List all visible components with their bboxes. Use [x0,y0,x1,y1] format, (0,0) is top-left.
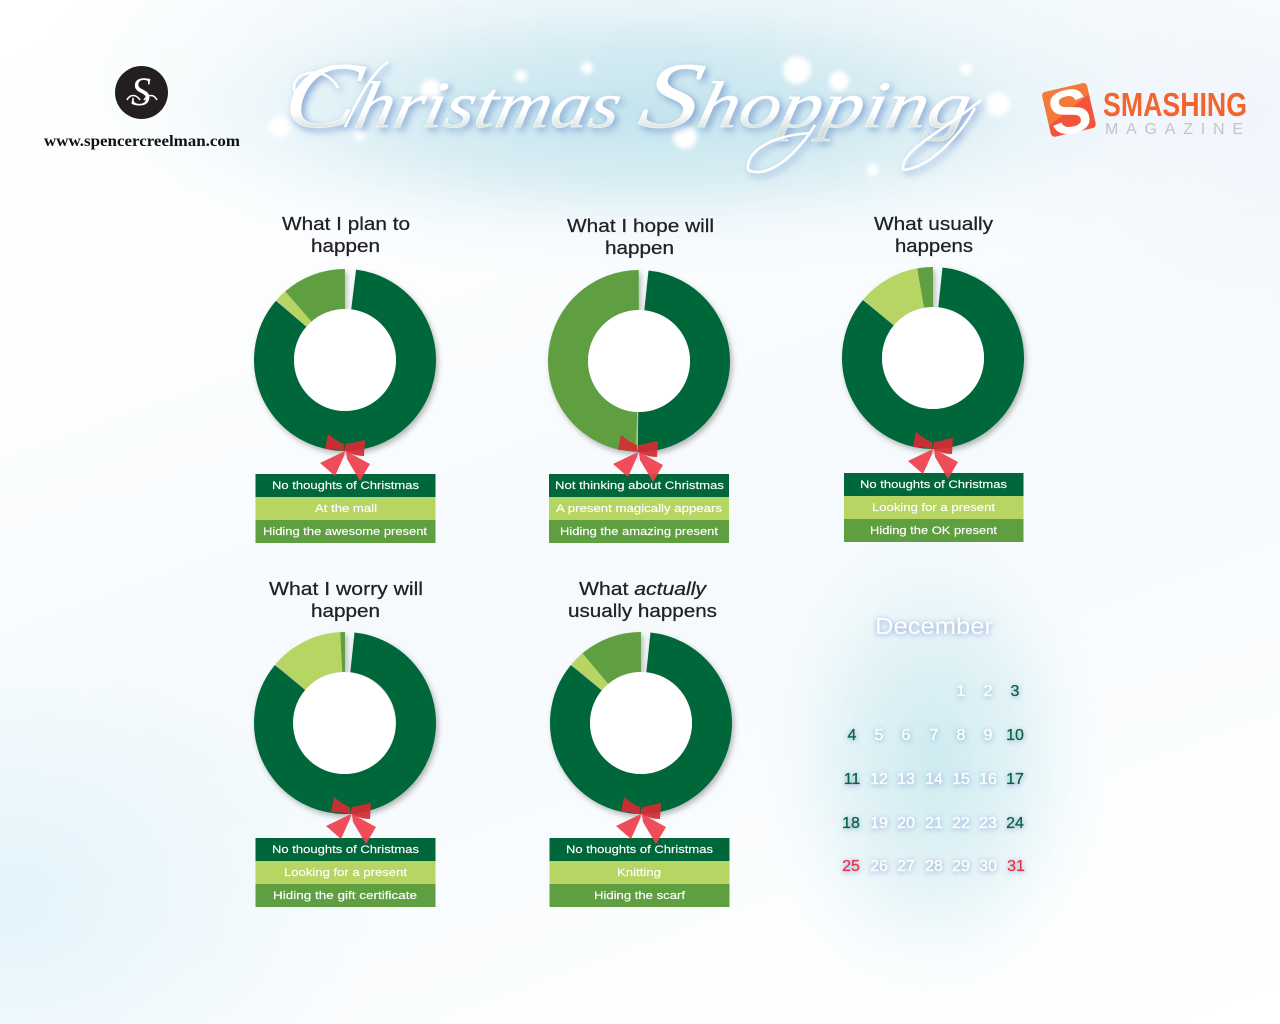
calendar dates: 25 [842,858,860,875]
panel: what actually usually happens [541,579,741,907]
legend: Hiding the gift certificate [273,890,417,902]
legend: Looking for a present [872,502,995,514]
heading: happens [895,236,973,256]
author logo: SC monogram [115,66,168,119]
heading: happen [605,238,674,258]
donut chart [245,623,445,823]
calendar dates: 11 [844,771,860,788]
calendar dates: 2 [984,683,993,700]
heading [874,214,993,256]
heading [269,579,423,621]
legend: Not thinking about Christmas [555,480,725,492]
calendar month: December [875,613,993,639]
legend: Looking for a present [284,867,407,879]
heading: What I worry will [269,579,423,599]
calendar dates: 31 [1007,858,1025,875]
legend: No thoughts of Christmas [566,844,714,856]
calendar dates: 10 [1006,727,1024,744]
heading: What I hope will [567,216,714,236]
legend: Knitting [617,867,661,879]
title: Christmas [276,43,634,148]
legend: Hiding the awesome present [263,526,427,538]
icon: red bow [616,797,666,844]
legend [550,838,730,907]
heading [282,214,410,256]
calendar dates: 22 [952,815,970,832]
calendar dates: 13 [897,771,915,788]
legend: No thoughts of Christmas [272,480,420,492]
author url: www.spencercreelman.com [44,133,241,150]
calendar dates: 15 [952,771,970,788]
author logo: SC monogram: S [131,69,151,114]
legend [549,474,729,543]
smashing magazine logo [1039,74,1247,151]
heading: What actually [579,579,707,599]
title: Shopping [632,43,984,148]
legend: At the mall [315,503,377,515]
calendar dates: 5 [875,727,884,744]
calendar dates: 3 [1011,683,1020,700]
tagline: MAGAZINE [1105,121,1243,138]
calendar dates: 1 [957,683,966,700]
heading: What I plan to [282,214,410,234]
calendar dates: 4 [848,727,857,744]
legend: Hiding the scarf [594,890,686,902]
snowflake bokeh dots [269,56,1010,176]
calendar dates: 26 [870,858,888,875]
calendar dates [842,683,1025,875]
heading: happen [311,236,380,256]
calendar dates: 30 [979,858,997,875]
donut chart [561,283,717,439]
legend: Hiding the OK present [870,525,997,537]
heading [568,579,717,621]
icon: red bow [326,797,376,844]
panel: what I plan to happen [245,214,445,543]
title [276,43,984,172]
icon: smashing S badge: S [1042,74,1097,151]
heading: happen [311,601,380,621]
legend: No thoughts of Christmas [860,479,1008,491]
calendar dates: 8 [957,727,966,744]
heading: usually happens [568,601,717,621]
legend [256,838,436,907]
calendar dates: 17 [1006,771,1024,788]
calendar dates: 29 [952,858,970,875]
icon: red bow [613,435,663,482]
heading [567,216,714,258]
calendar dates: 20 [897,815,915,832]
panel: what usually happens [833,214,1033,542]
calendar dates: 16 [979,771,997,788]
icon: red bow [908,432,958,479]
calendar dates: 6 [902,727,911,744]
legend [256,474,436,543]
icon: red bow [320,434,370,481]
panel: what I worry will happen [245,579,445,907]
calendar dates: 19 [870,815,888,832]
calendar dates: 7 [930,727,939,744]
legend [844,473,1024,542]
calendar dates: 12 [870,771,888,788]
calendar dates: 27 [897,858,915,875]
heading: What usually [874,214,993,234]
calendar dates: 23 [979,815,997,832]
calendar dates: 14 [925,771,943,788]
calendar dates: 9 [984,727,993,744]
donut chart [541,623,741,823]
calendar dates: 24 [1006,815,1024,832]
wordmark: SMASHING [1103,86,1247,123]
panel: what I hope will happen [549,216,729,543]
calendar dates: 28 [925,858,943,875]
donut chart [245,260,445,460]
calendar [842,613,1025,875]
legend: No thoughts of Christmas [272,844,420,856]
calendar dates: 21 [925,815,943,832]
calendar dates: 18 [842,815,860,832]
legend: A present magically appears [556,503,723,515]
donut chart [833,258,1033,458]
legend: Hiding the amazing present [560,526,718,538]
